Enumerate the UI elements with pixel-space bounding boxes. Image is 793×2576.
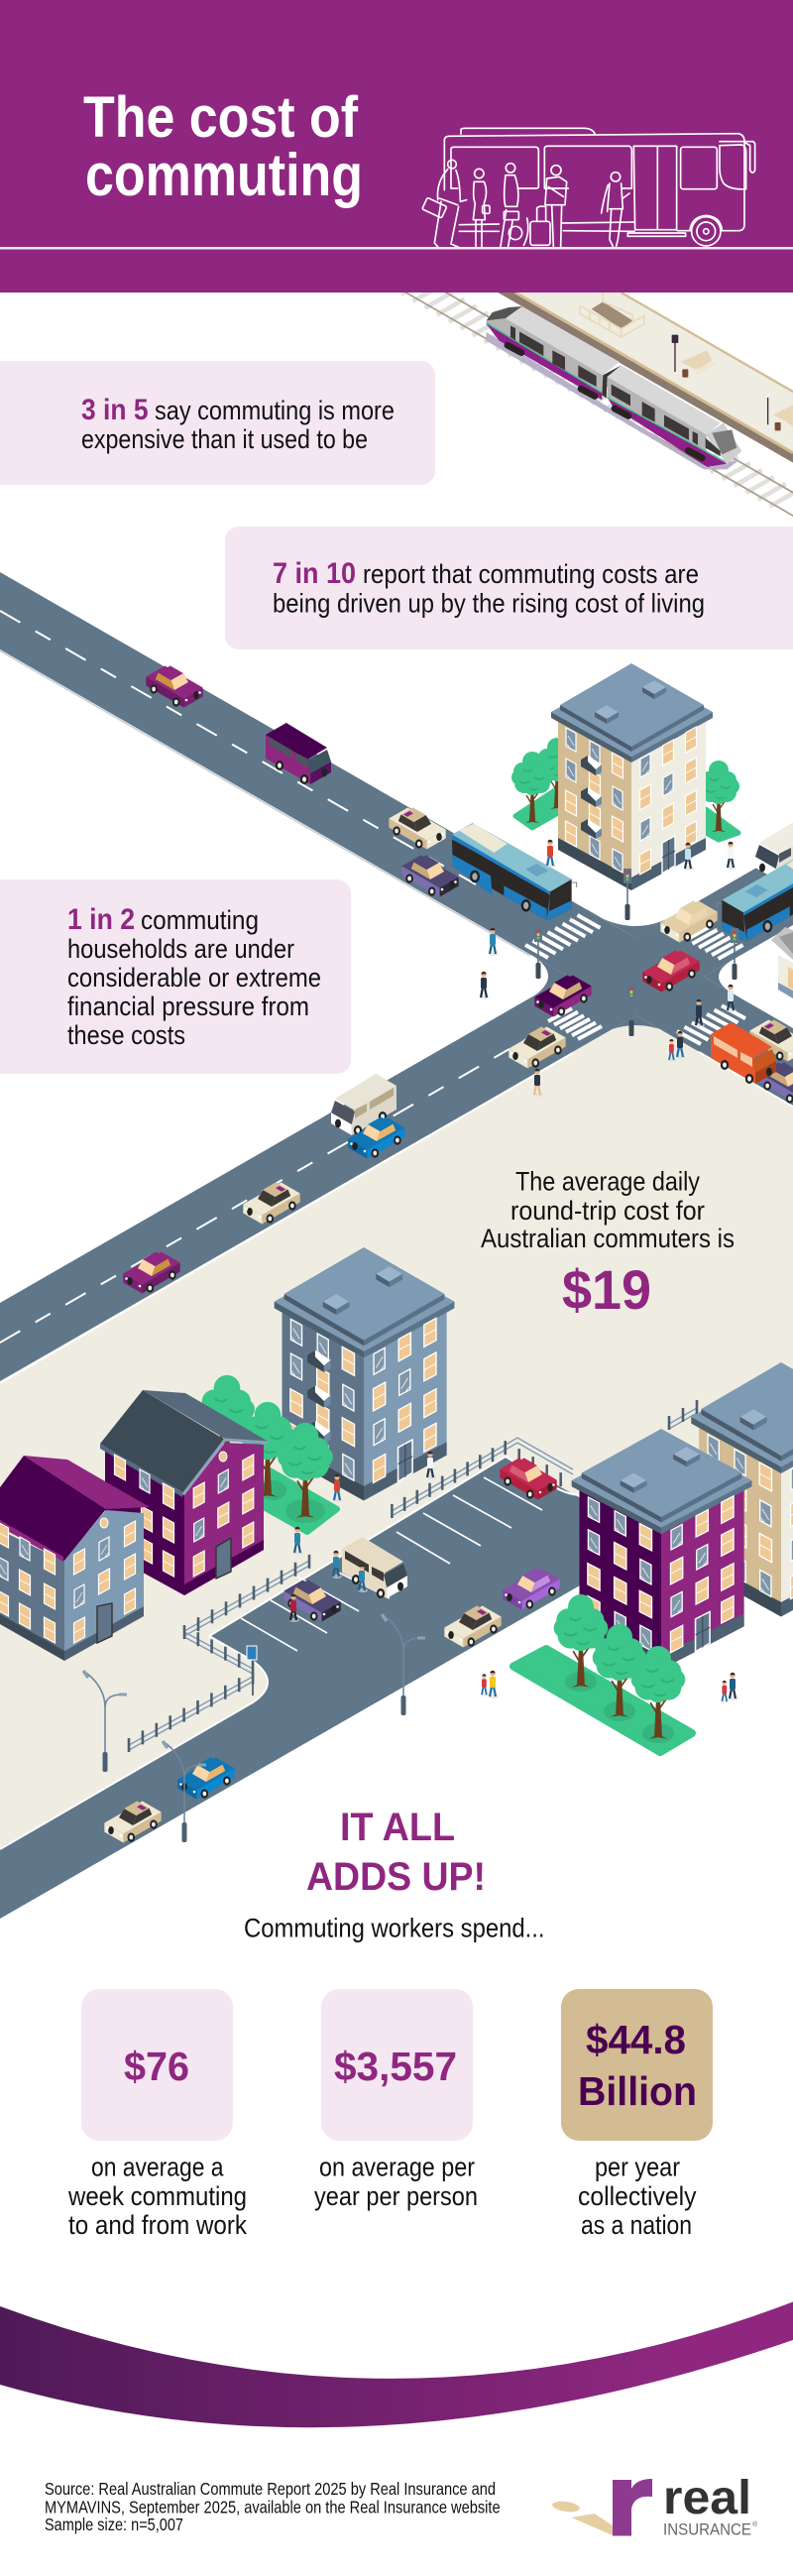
traffic light: top [623, 869, 631, 920]
card: yearly [314, 1989, 478, 2211]
card: national: $44.8 [586, 2017, 686, 2062]
tree: lot back [199, 1375, 255, 1470]
tree: bottom right [631, 1646, 685, 1739]
card: yearly: $3,557 [334, 2044, 457, 2089]
train [486, 306, 741, 469]
car: blue lower road [177, 1757, 235, 1799]
fences [129, 1400, 697, 1752]
house: grey [0, 1456, 150, 1661]
panel: 3 in 5: expensive than it used to be [81, 424, 368, 454]
card: national [561, 1989, 713, 2240]
building: slate [275, 1247, 454, 1500]
grass: bottom strip [513, 1649, 692, 1752]
car: purple road [123, 1251, 180, 1293]
house: purple [100, 1390, 269, 1595]
source note [45, 2479, 501, 2534]
decorative swoosh band [0, 2302, 793, 2427]
rail tracks [390, 268, 793, 518]
callout: daily cost [481, 1166, 735, 1321]
car: red parked [500, 1458, 557, 1499]
source note: Sample size: n=5,007 [45, 2515, 183, 2534]
card: national: Billion [578, 2068, 697, 2114]
tree: bottom left [554, 1594, 608, 1688]
car: taxi lower road [444, 1606, 502, 1648]
car: taxi lower [509, 1027, 566, 1069]
car: navy right [759, 1063, 793, 1105]
heading: it all adds up [306, 1806, 486, 1899]
person: man with case [501, 164, 518, 246]
title: The cost of [83, 85, 359, 150]
building: tan and cream [551, 663, 713, 890]
card: yearly: on average per [319, 2152, 475, 2181]
traffic light: centre [627, 985, 635, 1036]
title [83, 85, 363, 208]
text: commuting workers spend: Commuting workers spend... [244, 1914, 545, 1943]
lane markings [0, 611, 595, 1884]
card: yearly: year per person [314, 2181, 478, 2211]
person: man with briefcase [422, 160, 467, 247]
parking sign [247, 1646, 257, 1696]
bus: blue [452, 823, 577, 920]
callout: daily cost: round-trip cost for [510, 1196, 705, 1226]
callout: daily cost: Australian commuters is [481, 1224, 735, 1253]
card: weekly: to and from work [68, 2210, 248, 2240]
panel: 7 in 10 [225, 527, 793, 649]
car: lilac [503, 1569, 560, 1610]
street lamp: centre [382, 1614, 425, 1715]
car: taxi bottom [104, 1801, 162, 1842]
logo: Real Insurance: INSURANCE [663, 2520, 751, 2539]
van: purple [266, 723, 331, 784]
logo: Real Insurance [551, 2472, 758, 2539]
ground line [0, 247, 793, 250]
logo: Real Insurance: ® [752, 2520, 758, 2528]
panel: 7 in 10: report that commuting costs are [363, 559, 699, 589]
road shoulder line [0, 650, 530, 956]
tree: bottom middle [593, 1624, 646, 1717]
car: purple pickup [534, 976, 592, 1017]
panel: 1 in 2: financial pressure from [67, 992, 309, 1021]
source note: MYMAVINS, September 2025, available on the Real Insurance website [45, 2498, 501, 2517]
street lamp: left [83, 1671, 127, 1772]
card: national: as a nation [581, 2210, 692, 2240]
heading: it all adds up: ADDS UP! [306, 1855, 486, 1899]
card: weekly: week commuting [67, 2181, 247, 2211]
car: taxi right [749, 1019, 793, 1061]
car: taxi road [243, 1182, 300, 1224]
heading: it all adds up: IT ALL [340, 1806, 455, 1849]
road edge lines [0, 1052, 793, 1383]
callout: daily cost: $19 [562, 1258, 651, 1321]
pedestrians [289, 840, 738, 1702]
person: man with suitcase [530, 166, 567, 246]
icon: line-art bus with commuters [422, 128, 755, 247]
station platform [498, 293, 793, 463]
tree: left of building [511, 752, 553, 823]
grass: trees in lot [259, 1470, 337, 1532]
tree: behind building [536, 738, 578, 809]
car: tan [660, 900, 718, 942]
panel: 7 in 10: being driven up by the rising cost of living [273, 589, 705, 619]
callout: daily cost: The average daily [515, 1166, 701, 1196]
panel: 3 in 5: say commuting is more [155, 396, 395, 425]
person: woman at door [602, 173, 629, 246]
title: commuting [85, 142, 363, 208]
van: white top right [755, 818, 793, 879]
bus: second blue [717, 844, 793, 941]
person: woman [473, 169, 490, 246]
car: purple [146, 666, 203, 708]
car park edges [0, 1457, 579, 1849]
tree: right of building [698, 761, 739, 832]
crosswalks [525, 915, 745, 1044]
panel: 1 in 2: considerable or extreme [67, 963, 321, 993]
panel: 1 in 2: households are under [67, 934, 294, 964]
panel: 1 in 2: commuting [141, 905, 259, 935]
header band [0, 0, 793, 293]
panel: 3 in 5: 3 in 5 [81, 394, 149, 426]
building: tan far right [691, 1362, 793, 1616]
panel: 3 in 5 [0, 361, 435, 485]
panel: 1 in 2: 1 in 2 [67, 903, 135, 936]
card: national: per year [595, 2152, 680, 2181]
car: navy [401, 855, 459, 896]
grass: top building [515, 788, 738, 840]
logo: Real Insurance: real [663, 2472, 751, 2524]
car: blue [348, 1116, 405, 1158]
building: corner right [771, 927, 793, 998]
car: taxi [389, 807, 446, 849]
car park and lower road [0, 1457, 694, 1919]
panel: 1 in 2 [0, 879, 351, 1074]
van: beige parked [342, 1537, 407, 1598]
card: weekly: on average a [91, 2152, 224, 2181]
intersection corners [535, 908, 738, 1051]
van: white [331, 1074, 396, 1135]
van: orange [711, 1022, 776, 1084]
panel: 7 in 10: 7 in 10 [273, 557, 356, 590]
road: north-west to south-east [0, 572, 793, 1106]
road: south-west to north-east [0, 847, 793, 1381]
tree: lot front [278, 1423, 333, 1518]
street lamp: lower [163, 1741, 206, 1842]
card: weekly: $76 [124, 2044, 189, 2089]
panel: 1 in 2: these costs [67, 1020, 185, 1050]
card: weekly [67, 1989, 248, 2240]
source note: Source: Real Australian Commute Report 2025 by Real Insurance and [45, 2479, 496, 2499]
parking bays [241, 1477, 542, 1651]
building: purple [572, 1429, 751, 1670]
traffic light: left [534, 927, 542, 979]
traffic light: right [731, 928, 738, 980]
car: crimson [642, 950, 700, 992]
car: navy parked [283, 1581, 341, 1622]
tree: lot middle [240, 1402, 295, 1497]
card: national: collectively [578, 2181, 697, 2211]
panel: cream lot [0, 1015, 793, 1919]
